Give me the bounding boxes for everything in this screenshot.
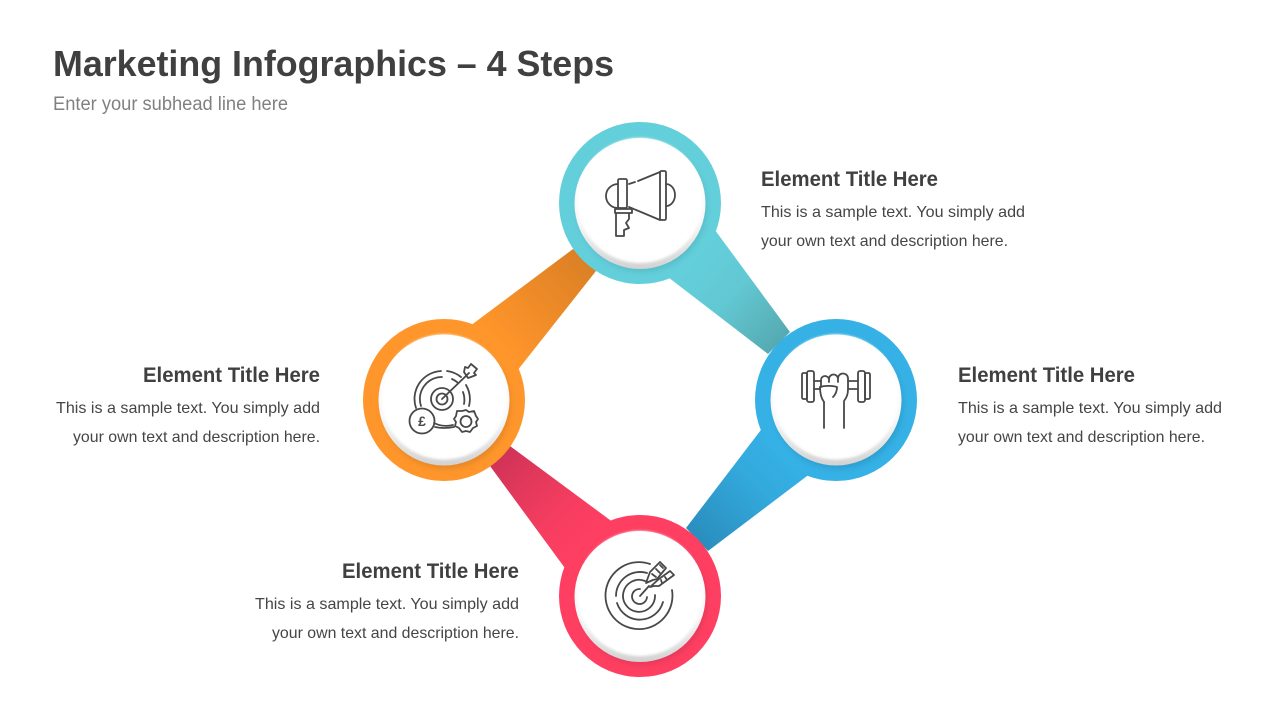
icon: fist with dumbbell [802,371,870,428]
step 2: orange circle [363,319,525,481]
connector: teal [664,226,790,354]
text block: top right: This is a sample text. You simply add [761,204,1025,221]
text block: middle left: Element Title Here [143,364,320,387]
icon: target with pound coin and gear [410,364,478,434]
text block: bottom left: This is a sample text. You simply add [255,596,519,613]
text block: middle left [56,364,320,446]
step 3: blue circle [755,319,917,481]
connector: red [490,446,614,575]
icon: target with arrow [605,562,674,629]
text block: middle left: your own text and description here. [73,429,320,446]
text block: middle left: This is a sample text. You simply add [56,400,320,417]
text block: middle right: your own text and description here. [958,429,1205,446]
text block: bottom left: your own text and description here. [272,625,519,642]
text block: middle right: This is a sample text. You simply add [958,400,1222,417]
text block: middle right [958,364,1222,446]
step 1: teal circle [559,122,721,284]
icon: target with pound coin and gear: £ [418,413,426,429]
text block: bottom left [255,560,519,642]
connector: orange [470,249,596,371]
step 4: red circle [559,515,721,677]
icon: megaphone [606,171,675,236]
title: Marketing Infographics – 4 Steps [53,43,614,84]
connector: blue [686,426,811,551]
text block: top right [761,168,1025,250]
text block: top right: Element Title Here [761,168,938,191]
text block: middle right: Element Title Here [958,364,1135,387]
text block: bottom left: Element Title Here [342,560,519,583]
subhead: Enter your subhead line here [53,94,288,115]
text block: top right: your own text and description here. [761,233,1008,250]
